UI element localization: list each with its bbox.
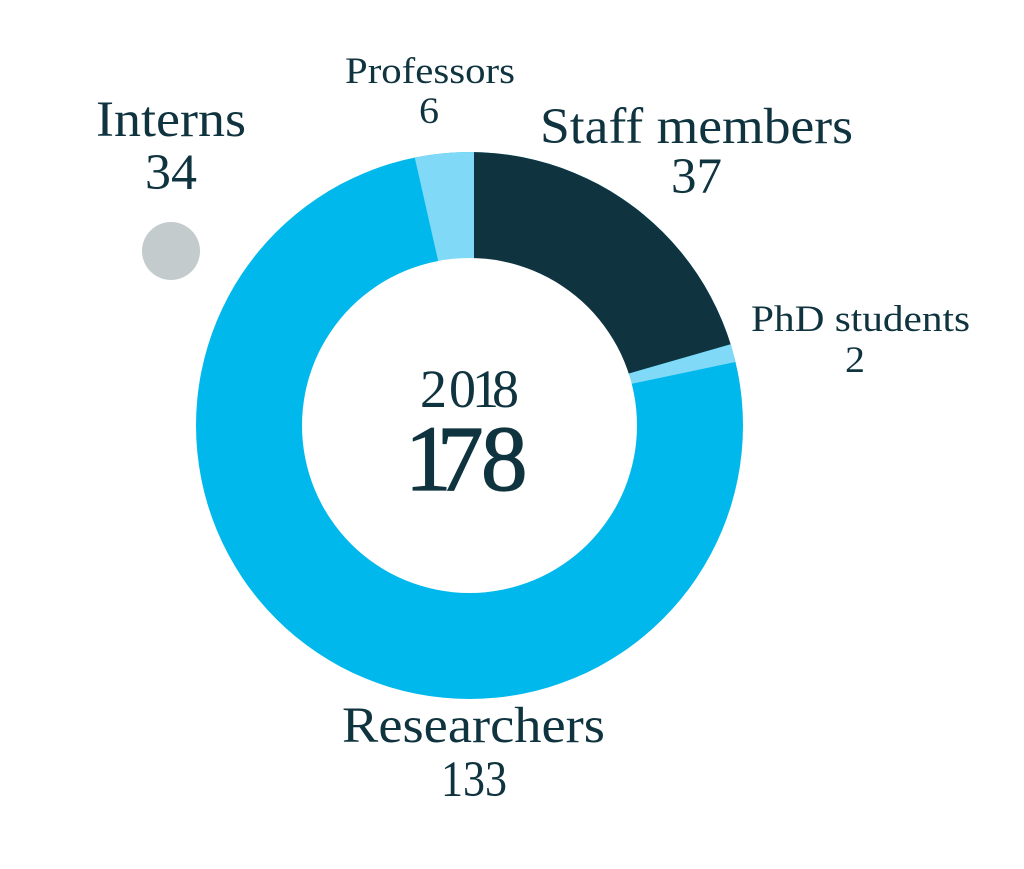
center label: total: 178 — [405, 408, 528, 511]
label: staff members: 37 — [671, 149, 722, 205]
label: interns: 34 — [145, 145, 197, 201]
label: researchers: Researchers — [342, 698, 605, 754]
label: staff members — [540, 99, 853, 205]
segment: staff members — [474, 152, 731, 374]
label: researchers: 133 — [441, 752, 507, 808]
label: professors — [345, 51, 515, 132]
segment: researchers — [196, 152, 743, 699]
label: interns: Interns — [96, 92, 246, 148]
label: researchers — [342, 698, 605, 808]
label: staff members: Staff members — [540, 99, 853, 155]
segment: professors — [414, 152, 474, 261]
label: professors: 6 — [419, 91, 439, 132]
label: professors: Professors — [345, 51, 515, 92]
icon: interns marker — [142, 222, 200, 280]
segment: PhD students — [628, 344, 736, 384]
label: PhD students — [751, 299, 970, 381]
label: PhD students: 2 — [845, 340, 865, 381]
donut hole — [302, 258, 637, 593]
label: PhD students: PhD students — [751, 299, 970, 340]
center label: year: 2018 — [420, 359, 519, 419]
label: interns — [96, 92, 246, 201]
donut chart — [196, 152, 743, 699]
